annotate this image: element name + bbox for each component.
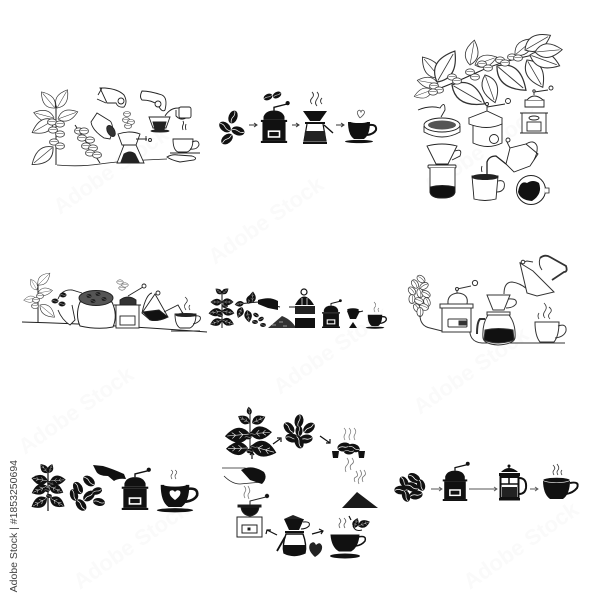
grinder [440, 280, 478, 332]
side text: stock id: Adobe Stock | #1853250694 [8, 460, 20, 592]
hand with branch [234, 291, 280, 323]
hand with cherries [52, 290, 82, 325]
watermark: Adobe Stock [419, 101, 544, 199]
french press [499, 464, 526, 500]
panel: line art branch and brewing tools [413, 29, 563, 204]
arrow [320, 436, 330, 443]
heart beans [309, 542, 322, 557]
arrow [349, 516, 351, 520]
arrow [273, 438, 281, 444]
coffee sack [78, 290, 115, 328]
box grinder [520, 86, 553, 133]
watermark: Adobe Stock [69, 496, 194, 594]
cup on hand [167, 121, 200, 162]
coffee branch with leaves [413, 29, 563, 112]
grinder [322, 299, 342, 328]
panel: black beans to coffee sequence [217, 90, 376, 147]
grinder [122, 468, 151, 510]
arrow [249, 123, 257, 127]
arrow [266, 530, 277, 535]
watermark: Adobe Stock [14, 361, 139, 459]
kettle with spout [504, 256, 567, 296]
watermark: Adobe Stock [204, 171, 329, 269]
coffee beans [68, 473, 106, 513]
coffee beans [217, 109, 246, 147]
hand with pour over [140, 91, 191, 132]
roaster with kettle [289, 289, 315, 328]
coffee plant [29, 462, 67, 512]
coffee cup [366, 302, 386, 329]
dripper and carafe [277, 515, 309, 556]
coffee plant [224, 406, 278, 460]
coffee cup [543, 464, 578, 499]
kettle [506, 138, 538, 172]
grinder [443, 462, 470, 501]
dripper [347, 308, 363, 328]
ground line [57, 159, 167, 166]
ground coffee pile [342, 492, 378, 508]
panel: line art from plant to cup [22, 270, 207, 332]
bean cluster and pile [252, 312, 296, 328]
connecting line [420, 315, 565, 343]
coffee cup with heart steam [345, 110, 376, 143]
arrow [292, 123, 299, 127]
hands with roller [222, 467, 266, 484]
panel: plant beans hand grinder cup [29, 462, 197, 513]
coffee cup with heart [157, 470, 197, 512]
coffee plant [208, 287, 235, 328]
chemex coffee maker [303, 92, 333, 144]
panel: circular coffee cycle [222, 406, 378, 558]
dripper and carafe [477, 295, 516, 345]
coffee cup [171, 297, 200, 331]
coffee beans [394, 471, 427, 503]
kettle pouring [142, 291, 184, 321]
hand grinder [117, 132, 152, 163]
coffee beans [281, 414, 317, 450]
leaves [351, 517, 371, 530]
panel: black silhouettes row [208, 287, 386, 329]
hand [93, 465, 126, 481]
coffee cherries branch [74, 125, 102, 163]
arrow [431, 487, 442, 491]
coffee plant [23, 270, 58, 322]
roasting beans [332, 428, 365, 458]
arrow [336, 123, 344, 127]
round grinder [469, 98, 510, 146]
watermark: Adobe Stock [269, 301, 394, 399]
mug with pouring coffee [472, 156, 506, 200]
ground line [22, 322, 207, 332]
grinder [261, 90, 290, 143]
arrow [312, 529, 323, 534]
top view cup [516, 176, 549, 204]
panel: beans grinder french press cup [394, 462, 578, 503]
bean cluster [407, 274, 432, 317]
dripper and carafe [427, 144, 461, 198]
watermark: Adobe Stock [49, 121, 174, 219]
coffee cup [330, 518, 365, 558]
panel: outlined beans grinder dripper kettle [407, 256, 567, 345]
arrow [469, 487, 497, 491]
steam [244, 486, 250, 499]
steam [345, 458, 366, 484]
hand pouring beans [91, 88, 135, 139]
watermark: Adobe Stock [409, 321, 534, 419]
coffee cup [535, 303, 566, 342]
grinder [114, 280, 146, 328]
grinder [237, 494, 269, 537]
arrow [250, 452, 254, 459]
coffee plant [28, 87, 79, 170]
panel: line art process with hands [28, 87, 200, 170]
arrow [530, 487, 538, 491]
watermark: Adobe Stock [459, 496, 584, 594]
watermark [14, 101, 584, 594]
roasting sieve with hand [418, 104, 460, 137]
